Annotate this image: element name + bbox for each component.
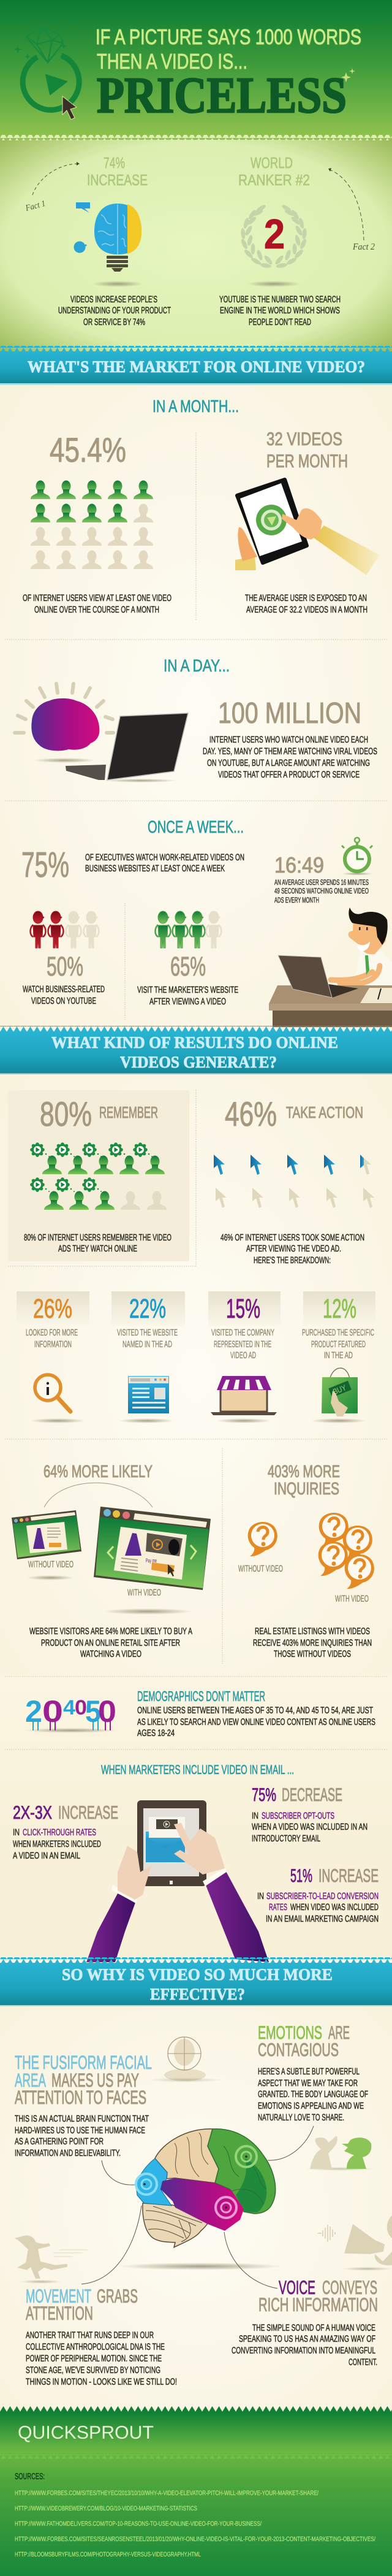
icon: age number characters	[24, 1694, 116, 1733]
chart: green figures 65%	[156, 911, 222, 948]
stat: 32 videos per month: PER MONTH	[266, 451, 348, 472]
arrow: fact 1: Fact 1	[24, 199, 47, 213]
text block: demographics	[137, 1688, 375, 1738]
text block: movement grabs attention: POWER OF PERIPHERAL MOTION. SINCE THE	[26, 2353, 162, 2364]
panel: 15% visited the company: REPRESENTED IN THE	[214, 1339, 271, 1350]
text block: fusiform facial area: HARD-WIRES US TO USE THE HUMAN FACE	[15, 2125, 145, 2136]
icon: browser without video	[12, 1510, 81, 1559]
panel: 64% more likely: WITH VIDEO	[127, 1588, 161, 1598]
stat: 2x-3x increase: 2X-3X	[13, 1803, 52, 1823]
panel: 403% more inquiries: WITHOUT VIDEO	[238, 1564, 283, 1574]
text: fact 2: ENGINE IN THE WORLD WHICH SHOWS	[220, 305, 340, 316]
arrow: fact 1	[24, 162, 80, 213]
heading: 74% increase: 74%	[104, 155, 125, 172]
stat: 2x-3x increase	[13, 1803, 118, 1861]
panel: 12% purchased the product: IN THE AD	[324, 1350, 353, 1361]
icon: face in crosshair	[148, 2037, 222, 2082]
panel: 22% visited the website: VISITED THE WEBSITE	[117, 1328, 178, 1338]
stat: 50%: WATCH BUSINESS-RELATED	[23, 984, 105, 995]
text block: fusiform facial area	[15, 2052, 152, 2158]
stat: 16:49: ADS EVERY MONTH	[274, 896, 319, 904]
panel: 15% visited the company: VISITED THE COMPANY	[211, 1328, 274, 1338]
text: 46% caption: AFTER VIEWING THE VDEO AD.	[246, 1244, 341, 1254]
stat: 2x-3x increase: CLICK-THROUGH RATES	[23, 1827, 96, 1838]
icon: age number characters: 4	[63, 1696, 75, 1719]
list: source urls: HTTP://WWW.VIDEOBREWERY.COM/BLOG/10-VIDEO-MARKETING-STATISTICS	[15, 2505, 197, 2512]
text block: emotions are contagious: EMOTIONS	[258, 2023, 322, 2043]
heading: 80% remember	[40, 1095, 158, 1133]
text: 403% caption: THOSE WITHOUT VIDEOS	[274, 1649, 351, 1659]
stat: 50%: 50%	[47, 952, 83, 982]
panel: 22% visited the website: NAMED IN THE AD	[123, 1339, 172, 1350]
chart: people pictogram 45.4%	[31, 481, 153, 569]
panel: 26% looked for more info: 26%	[33, 1294, 72, 1324]
illustration: brain and laptop	[15, 684, 188, 782]
panel: 12% purchased the product: 12%	[323, 1294, 356, 1324]
text: 64% caption: WATCHING A VIDEO	[80, 1649, 141, 1659]
text block: movement grabs attention: COLLECTIVE ANTHROPOLOGICAL DNA IS THE	[26, 2342, 165, 2352]
text: fact 1: OR SERVICE BY 74%	[83, 317, 145, 327]
text: 80% caption: ADS THEY WATCH ONLINE	[58, 1244, 137, 1254]
panel: fact 1	[24, 155, 171, 327]
text: fact 2	[219, 294, 341, 327]
text block: movement grabs attention: ANOTHER TRAIT THAT RUNS DEEP IN OUR	[26, 2330, 154, 2341]
stat: 75% decrease	[252, 1785, 368, 1844]
title: THEN A VIDEO IS...	[97, 50, 247, 74]
stat: 65%	[137, 952, 238, 1007]
text block: fusiform facial area: ATTENTION TO FACES	[15, 2087, 146, 2108]
icon: age number characters: 0	[75, 1696, 87, 1719]
heading: 403% more inquiries: INQUIRIES	[274, 1479, 339, 1498]
heading: 74% increase	[87, 155, 148, 189]
icon: browser window	[128, 1376, 169, 1413]
text block: fusiform facial area: THIS IS AN ACTUAL BRAIN FUNCTION THAT	[15, 2114, 149, 2124]
stat: 75%: OF EXECUTIVES WATCH WORK-RELATED VIDEOS ON	[85, 852, 244, 863]
icon: brain light bulb	[74, 202, 143, 287]
icon: contagious people	[304, 2136, 375, 2171]
chart: people with video thoughts	[30, 1142, 167, 1210]
stat: 51% increase	[257, 1866, 379, 1924]
icon: single question bubble	[248, 1522, 277, 1556]
panel: 22% visited the website: 22%	[129, 1294, 166, 1324]
illustration: man at laptop	[269, 908, 392, 1027]
text block: voice conveys rich information: VOICE	[279, 2277, 315, 2298]
text: 80% caption	[24, 1233, 172, 1254]
list: source urls: HTTP://BLOOMSBURYFILMS.COM/PHOTOGRAPHY-VERSUS-VIDEOGRAPHY.HTML	[15, 2551, 201, 2558]
text block: emotions are contagious: NATURALLY LOVE TO SHARE.	[258, 2112, 344, 2123]
heading: email section: WHEN MARKETERS INCLUDE VIDEO IN EMAIL ...	[101, 1763, 294, 1777]
panel: 80% remember	[8, 1090, 189, 1261]
stat: 75%	[21, 845, 244, 885]
banner: why is video more effective: EFFECTIVE?	[150, 1985, 245, 2003]
illustration: brain diagram	[81, 2126, 314, 2288]
text block: movement grabs attention: MOVEMENT	[26, 2285, 91, 2307]
text block: movement grabs attention	[26, 2285, 177, 2387]
panel: 64% more likely	[12, 1462, 211, 1659]
icon: stopwatch	[341, 838, 373, 876]
panel: 26% looked for more info: INFORMATION	[34, 1339, 72, 1350]
panel: 12% purchased the product	[302, 1291, 375, 1423]
stat: 32 videos per month	[266, 429, 348, 472]
heading: sources: SOURCES:	[15, 2471, 45, 2481]
icon: shopping bag: BUY	[331, 1383, 348, 1396]
text block: emotions are contagious: CONTAGIOUS	[258, 2040, 339, 2060]
arrow: fact 2	[328, 168, 375, 252]
text: 32 videos caption	[245, 593, 368, 615]
panel: 46% take action	[214, 1095, 374, 1266]
stat: 100 million: 100 MILLION	[218, 697, 361, 730]
text: fact 1: VIDEOS INCREASE PEOPLE'S	[70, 294, 157, 305]
stat: 45.4%: 45.4%	[50, 430, 126, 469]
text block: movement grabs attention: THINGS IN MOTION - LOOKS LIKE WE STILL DO!	[26, 2377, 177, 2387]
stat: 75% decrease: 75%	[252, 1785, 276, 1805]
icon: laurel wreath with number 2	[240, 204, 307, 287]
heading: 80% remember: REMEMBER	[99, 1103, 158, 1122]
text: 46% caption: HERE'S THE BREAKDOWN:	[254, 1255, 331, 1266]
title: priceless: PRICELESS	[97, 67, 347, 123]
text block: movement grabs attention: ATTENTION	[26, 2303, 93, 2324]
text block: fusiform facial area: INFORMATION AND BELIEVABILITY.	[15, 2148, 121, 2158]
stat: 65%: AFTER VIEWING A VIDEO	[149, 996, 226, 1007]
heading: 403% more inquiries	[268, 1462, 340, 1498]
stat: 75%: BUSINESS WEBSITES AT LEAST ONCE A WEEK	[85, 863, 225, 874]
panel: 15% visited the company: VIDEO AD	[230, 1350, 256, 1361]
title	[96, 25, 361, 74]
text: 45.4% caption: OF INTERNET USERS VIEW AT LEAST ONE VIDEO	[23, 593, 172, 603]
heading: once a week: ONCE A WEEK...	[148, 817, 244, 836]
text block: voice conveys rich information	[232, 2277, 378, 2368]
text block: demographics: DEMOGRAPHICS DON'T MATTER	[137, 1688, 265, 1704]
icon: age number characters: 0	[42, 1694, 63, 1729]
stat: 75%: 75%	[21, 845, 69, 885]
text: 403% caption	[253, 1626, 372, 1659]
stat: 75% decrease: SUBSCRIBER OPT-OUTS	[262, 1811, 334, 1821]
text: 46% caption	[221, 1233, 364, 1266]
icon: shopping bag	[322, 1368, 358, 1416]
text: 100 million caption	[203, 735, 377, 780]
heading: world ranker: WORLD	[251, 155, 293, 172]
arrow: fact 2: Fact 2	[352, 242, 375, 252]
heading: 403% more inquiries: 403% MORE	[268, 1462, 340, 1481]
icon: megaphone with sound wave	[318, 2215, 392, 2271]
text block: fusiform facial area: MAKES US PAY	[51, 2070, 139, 2091]
footer panel	[0, 2406, 392, 2576]
icon: four question bubbles	[318, 1513, 374, 1589]
stat: 16:49	[274, 852, 369, 904]
panel: 64% more likely: WITHOUT VIDEO	[28, 1559, 74, 1570]
text block: fusiform facial area: AREA	[15, 2070, 46, 2091]
panel: 15% visited the company: 15%	[226, 1294, 260, 1324]
heading: 46% take action: 46%	[225, 1095, 277, 1133]
heading: in a day: IN A DAY...	[164, 656, 230, 675]
panel: 403% more inquiries: WITH VIDEO	[335, 1594, 369, 1604]
stat: 16:49: 16:49	[274, 852, 324, 877]
stat: 2x-3x increase: A VIDEO IN AN EMAIL	[13, 1851, 80, 1861]
icon: hand on tablet	[235, 480, 380, 575]
banner: why is video more effective: SO WHY IS VIDEO SO MUCH MORE	[62, 1965, 333, 1984]
banner: results of online videos	[0, 1026, 392, 1074]
panel: 26% looked for more info: LOOKED FOR MORE	[26, 1328, 78, 1338]
icon: age number characters: 0	[98, 1694, 116, 1729]
text block: movement grabs attention: STONE AGE, WE'VE SURVIVED BY NOTICING	[26, 2365, 160, 2375]
icon: diamond ring with play button	[13, 23, 79, 120]
text block: fusiform facial area: AS A GATHERING POINT FOR	[15, 2136, 104, 2147]
illustration: hands holding tablet with email	[86, 1800, 269, 1962]
heading: world ranker: RANKER #2	[238, 172, 310, 189]
stat: 51% increase: RATES	[269, 1902, 287, 1913]
stat: 65%: VISIT THE MARKETER'S WEBSITE	[137, 985, 238, 995]
heading: 64% more likely: 64% MORE LIKELY	[43, 1462, 153, 1481]
text block: emotions are contagious: ARE	[328, 2023, 350, 2043]
heading: 80% remember: 80%	[40, 1095, 92, 1133]
icon: laurel wreath with number 2: 2	[264, 211, 285, 258]
banner: market for online video: WHAT'S THE MARKET FOR ONLINE VIDEO?	[28, 357, 365, 376]
stat: 50%: VIDEOS ON YOUTUBE	[31, 996, 96, 1006]
text: fact 2: PEOPLE DON'T READ	[249, 317, 311, 327]
text: fact 1: UNDERSTANDING OF YOUR PRODUCT	[58, 305, 171, 316]
text: 64% caption: PRODUCT ON AN ONLINE RETAIL SITE AFTER	[41, 1638, 180, 1648]
text: fact 1	[58, 294, 171, 327]
heading: 46% take action: TAKE ACTION	[286, 1103, 363, 1122]
heading: 46% take action	[225, 1095, 363, 1133]
stat: 65%: 65%	[170, 952, 206, 982]
banner: results of online videos: VIDEOS GENERATE?	[120, 1053, 277, 1071]
stat: 75% decrease: DECREASE	[282, 1785, 342, 1805]
panel: 22% visited the website	[111, 1291, 185, 1423]
stat: 50%	[23, 952, 105, 1006]
text block: emotions are contagious	[258, 2023, 368, 2123]
stat: 2x-3x increase: IN	[13, 1827, 20, 1838]
panel: 15% visited the company	[208, 1291, 281, 1423]
banner: market for online video	[0, 346, 392, 385]
text block: demographics: AGES 18-24	[137, 1728, 175, 1738]
banner: why is video more effective	[0, 1957, 392, 2006]
text: 64% caption: WEBSITE VISITORS ARE 64% MORE LIKELY TO BUY A	[29, 1626, 192, 1637]
stat: 51% increase: IN	[257, 1891, 264, 1901]
icon: running figure	[15, 2236, 88, 2284]
logo: quicksprout: QUICKSPROUT	[18, 2423, 154, 2443]
icon: storefront laptop	[211, 1376, 277, 1415]
text: 45.4% caption	[23, 593, 172, 615]
icon: browser with video: Pay me	[146, 1557, 157, 1564]
heading: world ranker	[238, 155, 310, 189]
icon: magnifier	[35, 1375, 70, 1412]
panel: 403% more inquiries	[238, 1462, 374, 1659]
text block: fusiform facial area: THE FUSIFORM FACIAL	[15, 2052, 152, 2073]
heading: 74% increase: INCREASE	[87, 172, 148, 189]
text: 64% caption	[29, 1626, 192, 1659]
stat: 32 videos per month: 32 VIDEOS	[266, 429, 342, 449]
text: 80% caption: 80% OF INTERNET USERS REMEMBER THE VIDEO	[24, 1233, 172, 1243]
text: 45.4% caption: ONLINE OVER THE COURSE OF A MONTH	[34, 605, 159, 615]
panel: fact 2	[219, 155, 375, 327]
chart: red figures 50%	[31, 911, 99, 948]
stat: 75% decrease: INTRODUCTORY EMAIL	[252, 1833, 320, 1844]
text block: movement grabs attention: GRABS	[97, 2285, 138, 2307]
heading: in a month: IN A MONTH...	[153, 397, 239, 416]
banner: results of online videos: WHAT KIND OF RESULTS DO ONLINE	[51, 1033, 338, 1052]
stat: 51% increase: 51%	[290, 1866, 312, 1886]
stat: 2x-3x increase: WHEN MARKETERS INCLUDED	[13, 1839, 101, 1849]
stat: 2x-3x increase: INCREASE	[58, 1803, 118, 1823]
stat: 75% decrease: IN	[252, 1811, 258, 1821]
panel: 26% looked for more info	[17, 1291, 89, 1423]
icon: age number characters: 2	[25, 1694, 42, 1729]
icon: browser with video	[94, 1507, 211, 1590]
chart: cursor pictogram	[214, 1155, 374, 1208]
icon: age number characters: 5	[85, 1694, 101, 1729]
list: source urls	[15, 2490, 375, 2558]
list: source urls: HTTP://WWW.FATHOMDELIVERS.COM/TOP-10-REASONS-TO-USE-ONLINE-VIDEO-FOR-YOUR-BUSINESS/	[15, 2520, 262, 2528]
